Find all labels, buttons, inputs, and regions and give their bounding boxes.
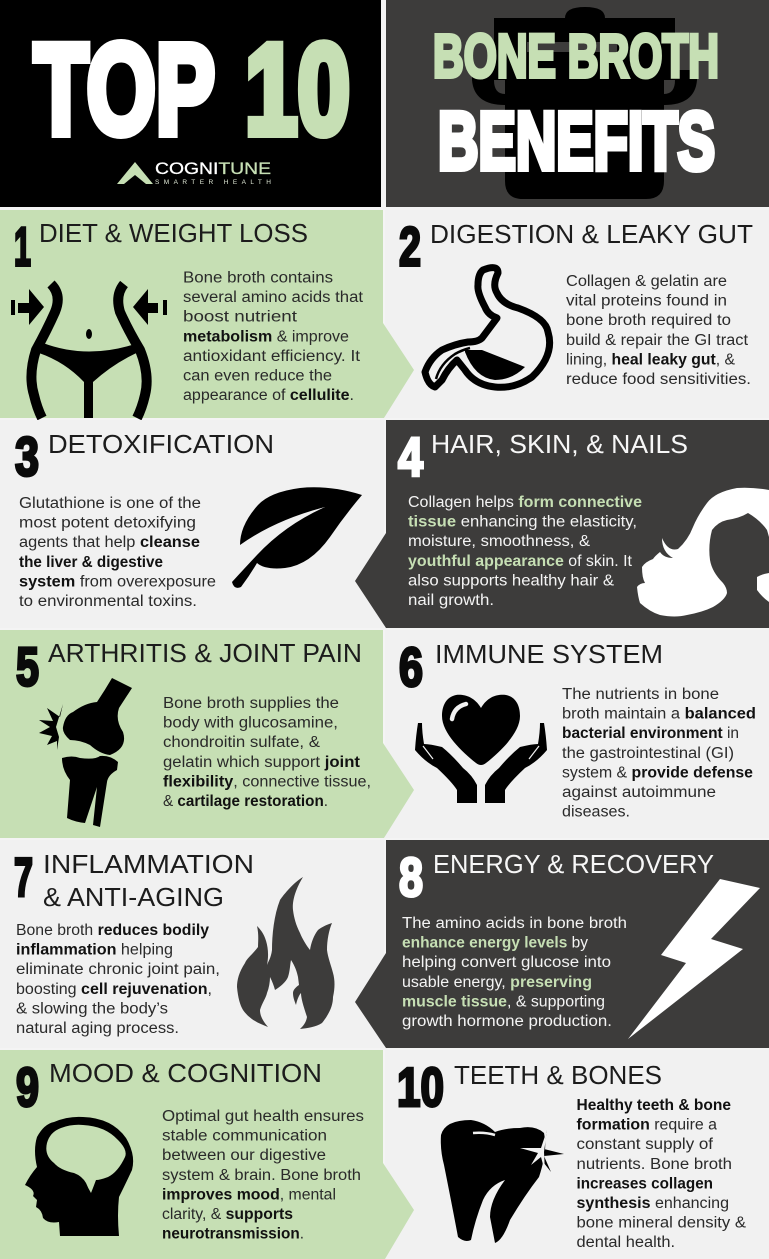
- panel: 2 digestion: [385, 210, 769, 418]
- text: boosting cell rejuvenation ,: [16, 981, 212, 998]
- panel: 1 diet: [0, 210, 414, 418]
- panel: header right: [386, 0, 769, 207]
- number 3: 3: [15, 426, 39, 488]
- icon: waist: [11, 284, 167, 418]
- text: system from overexposure: [19, 573, 216, 590]
- text: nail growth.: [408, 592, 494, 609]
- text: inflammation helping: [16, 942, 173, 959]
- heading: DIET & WEIGHT LOSS: [39, 218, 308, 248]
- text: Healthy teeth & bone: [576, 1097, 731, 1114]
- text: The amino acids in bone broth: [402, 915, 627, 932]
- text: antioxidant efficiency. It: [183, 348, 361, 365]
- text: also supports healthy hair &: [408, 572, 615, 589]
- text: agents that help cleanse: [19, 534, 200, 551]
- text: eliminate chronic joint pain,: [16, 961, 220, 978]
- text: body with glucosamine,: [163, 715, 338, 732]
- panel: 7 inflammation: [0, 840, 384, 1048]
- heading: DETOXIFICATION: [48, 429, 274, 459]
- text: tissue enhancing the elasticity,: [408, 514, 637, 531]
- text: gelatin which support joint: [163, 754, 360, 771]
- text: between our digestive: [162, 1147, 326, 1164]
- text: reduce food sensitivities.: [566, 371, 751, 388]
- panel: 8 energy: [355, 840, 769, 1048]
- text: bone broth required to: [566, 312, 731, 329]
- icon: head with brain: [25, 1117, 133, 1236]
- heading: & ANTI-AGING: [43, 882, 224, 912]
- text: the gastrointestinal (GI): [562, 745, 734, 762]
- heading: DIGESTION & LEAKY GUT: [430, 219, 753, 249]
- heading: MOOD & COGNITION: [49, 1058, 322, 1088]
- text: Optimal gut health ensures: [162, 1108, 364, 1125]
- text: The nutrients in bone: [562, 686, 719, 703]
- text: chondroitin sulfate, &: [163, 734, 321, 751]
- text: flexibility, connective tissue,: [163, 773, 371, 790]
- logo: cognitune: [117, 159, 271, 186]
- text: system & brain. Bone broth: [162, 1167, 361, 1184]
- icon: lightning bolt: [628, 879, 760, 1039]
- text: Bone broth reduces bodily: [16, 922, 209, 939]
- text: diseases.: [562, 804, 630, 821]
- number 7: 7: [14, 846, 33, 908]
- text: [566, 273, 751, 388]
- text: appearance of cellulite.: [183, 387, 354, 404]
- icon: knee joint: [39, 678, 132, 827]
- text: broth maintain a balanced: [562, 706, 756, 723]
- icon: hands and heart: [415, 695, 547, 803]
- text: growth hormone production.: [402, 1013, 612, 1030]
- icon: hair silhouette: [637, 488, 769, 616]
- logo: cognitune: COGNI TUNE: [155, 159, 271, 178]
- number 8: 8: [399, 846, 423, 908]
- heading: ENERGY & RECOVERY: [433, 849, 714, 879]
- text: muscle tissue, & supporting: [402, 993, 605, 1010]
- number 10: 10: [397, 1056, 444, 1118]
- text: neurotransmission.: [162, 1226, 304, 1243]
- heading: ARTHRITIS & JOINT PAIN: [48, 638, 362, 668]
- text: youthful appearance of skin. It: [408, 553, 633, 570]
- text: to environmental toxins.: [19, 593, 197, 610]
- text: [163, 695, 371, 810]
- text: [402, 915, 627, 1030]
- text: Bone broth contains: [183, 270, 333, 286]
- heading: TEETH & BONES: [454, 1060, 662, 1090]
- number 6: 6: [399, 636, 423, 698]
- text: bacterial environment in: [562, 725, 739, 742]
- text: usable energy, preserving: [402, 974, 592, 991]
- text: [162, 1108, 364, 1243]
- text: metabolism & improve: [183, 328, 349, 345]
- text: Collagen helps form connective: [408, 494, 642, 511]
- panel: 10 teeth and bones: [385, 1050, 769, 1259]
- text: natural aging process.: [16, 1020, 179, 1037]
- text: vital proteins found in: [566, 293, 727, 310]
- icon: stomach: [425, 268, 550, 387]
- text: moisture, smoothness, &: [408, 533, 591, 550]
- text: Bone broth supplies the: [163, 695, 339, 712]
- text: can even reduce the: [183, 368, 332, 384]
- text: system & provide defense: [562, 764, 753, 781]
- text: [562, 686, 756, 821]
- heading: [43, 849, 254, 912]
- title: top 10: TOP: [34, 18, 215, 162]
- text: build & repair the GI tract: [566, 332, 749, 349]
- text: [183, 270, 364, 404]
- text: & cartilage restoration.: [163, 793, 328, 810]
- number 1: 1: [14, 216, 31, 278]
- panel: 3 detoxification: [0, 420, 384, 628]
- icon: flame: [237, 877, 334, 1029]
- heading: INFLAMMATION: [43, 849, 254, 879]
- text: clarity, & supports: [162, 1206, 293, 1223]
- text: formation require a: [576, 1117, 717, 1134]
- icon: leaf: [232, 487, 362, 588]
- panel: 9 mood and cognition: [0, 1050, 414, 1259]
- text: bone mineral density &: [576, 1215, 747, 1232]
- text: the liver & digestive: [19, 554, 163, 571]
- number 5: 5: [16, 636, 39, 698]
- icon: tooth: [441, 1120, 564, 1243]
- text: lining, heal leaky gut, &: [566, 351, 736, 368]
- text: [576, 1097, 747, 1251]
- text: [19, 495, 216, 610]
- text: boost nutrient: [183, 309, 298, 326]
- text: stable communication: [162, 1128, 327, 1145]
- text: Glutathione is one of the: [19, 495, 201, 512]
- panel: 4 hair skin nails: [355, 420, 769, 628]
- heading: IMMUNE SYSTEM: [435, 639, 663, 669]
- text: constant supply of: [576, 1136, 714, 1153]
- text: dental health.: [576, 1234, 675, 1251]
- text: helping convert glucose into: [402, 954, 611, 971]
- text: & slowing the body’s: [16, 1000, 168, 1017]
- number 4: 4: [398, 426, 423, 488]
- logo: cognitune: SMARTER HEALTH: [155, 179, 271, 186]
- text: nutrients. Bone broth: [576, 1156, 732, 1173]
- text: against autoimmune: [562, 784, 716, 801]
- panel: header left: [0, 0, 381, 207]
- text: most potent detoxifying: [19, 515, 196, 532]
- text: Collagen & gelatin are: [566, 273, 727, 290]
- text: several amino acids that: [183, 289, 364, 306]
- text: improves mood, mental: [162, 1186, 336, 1203]
- panel: 5 arthritis: [0, 630, 414, 838]
- text: [408, 494, 642, 609]
- text: [16, 922, 220, 1037]
- panel: 6 immune system: [385, 630, 769, 838]
- number 9: 9: [16, 1056, 39, 1118]
- text: synthesis enhancing: [576, 1195, 729, 1212]
- number 2: 2: [399, 216, 421, 278]
- heading: HAIR, SKIN, & NAILS: [431, 429, 688, 459]
- icon: pot: [472, 7, 697, 199]
- text: enhance energy levels by: [402, 935, 588, 952]
- title: top 10: 10: [245, 18, 350, 162]
- text: increases collagen: [576, 1175, 713, 1192]
